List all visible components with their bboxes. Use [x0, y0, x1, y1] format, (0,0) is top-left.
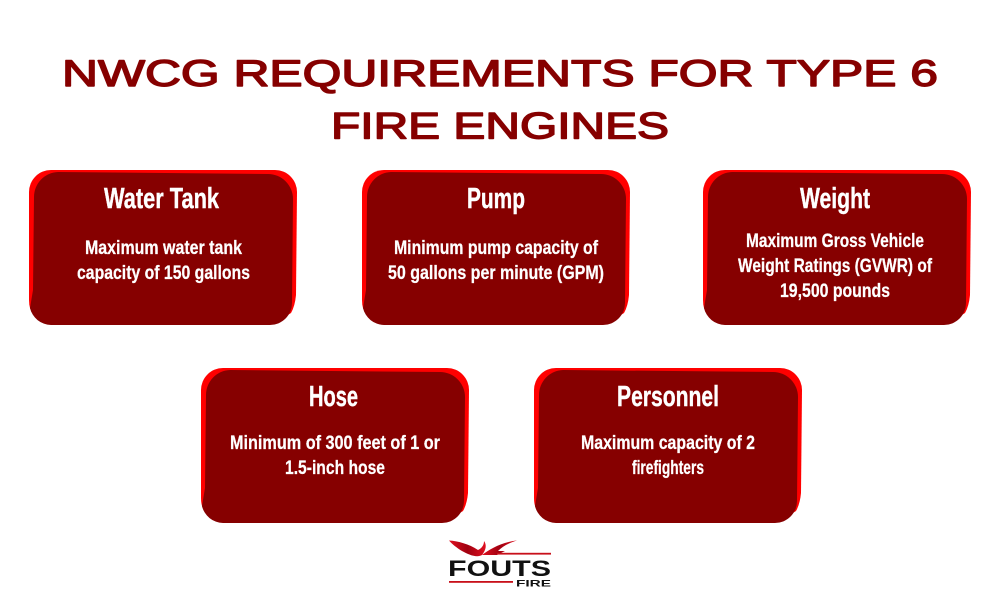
divider line	[449, 581, 513, 583]
heading: hose: Hose	[309, 381, 358, 413]
text: water tank requirement	[77, 237, 250, 284]
text: weight requirement: Weight Ratings (GVWR) of	[738, 255, 932, 277]
heading: water tank: Water Tank	[104, 183, 219, 215]
text: hose requirement	[230, 432, 440, 479]
text: water tank requirement: capacity of 150 gallons	[77, 262, 250, 284]
text: personnel requirement: firefighters	[632, 457, 704, 479]
text: pump requirement	[388, 237, 604, 284]
heading: weight: Weight	[800, 183, 870, 215]
text: hose requirement: 1.5-inch hose	[285, 457, 385, 479]
logo: Fouts Fire	[448, 540, 551, 588]
panel: pump	[362, 170, 630, 325]
text: personnel requirement: Maximum capacity of 2	[581, 432, 755, 454]
title: FIRE ENGINES	[331, 106, 669, 146]
text: weight requirement: 19,500 pounds	[780, 280, 890, 302]
title	[62, 53, 938, 146]
panel: personnel	[534, 368, 802, 523]
panel: weight	[703, 170, 971, 325]
icon: flame wings	[449, 540, 551, 556]
heading: personnel: Personnel	[617, 381, 719, 413]
text: hose requirement: Minimum of 300 feet of 1 or	[230, 432, 440, 454]
text: pump requirement: Minimum pump capacity of	[394, 237, 598, 259]
panel: hose	[201, 368, 469, 523]
text: weight requirement: Maximum Gross Vehicle	[746, 230, 924, 252]
text: weight requirement	[738, 230, 932, 302]
text: pump requirement: 50 gallons per minute (GPM)	[388, 262, 604, 284]
logo: Fouts Fire: FIRE	[516, 578, 551, 588]
title: NWCG REQUIREMENTS FOR TYPE 6	[62, 53, 938, 94]
text: personnel requirement	[581, 432, 755, 479]
panel: water tank	[29, 170, 297, 325]
text: water tank requirement: Maximum water tank	[85, 237, 242, 259]
logo: Fouts Fire: FOUTS	[448, 556, 551, 581]
heading: pump: Pump	[467, 183, 525, 215]
